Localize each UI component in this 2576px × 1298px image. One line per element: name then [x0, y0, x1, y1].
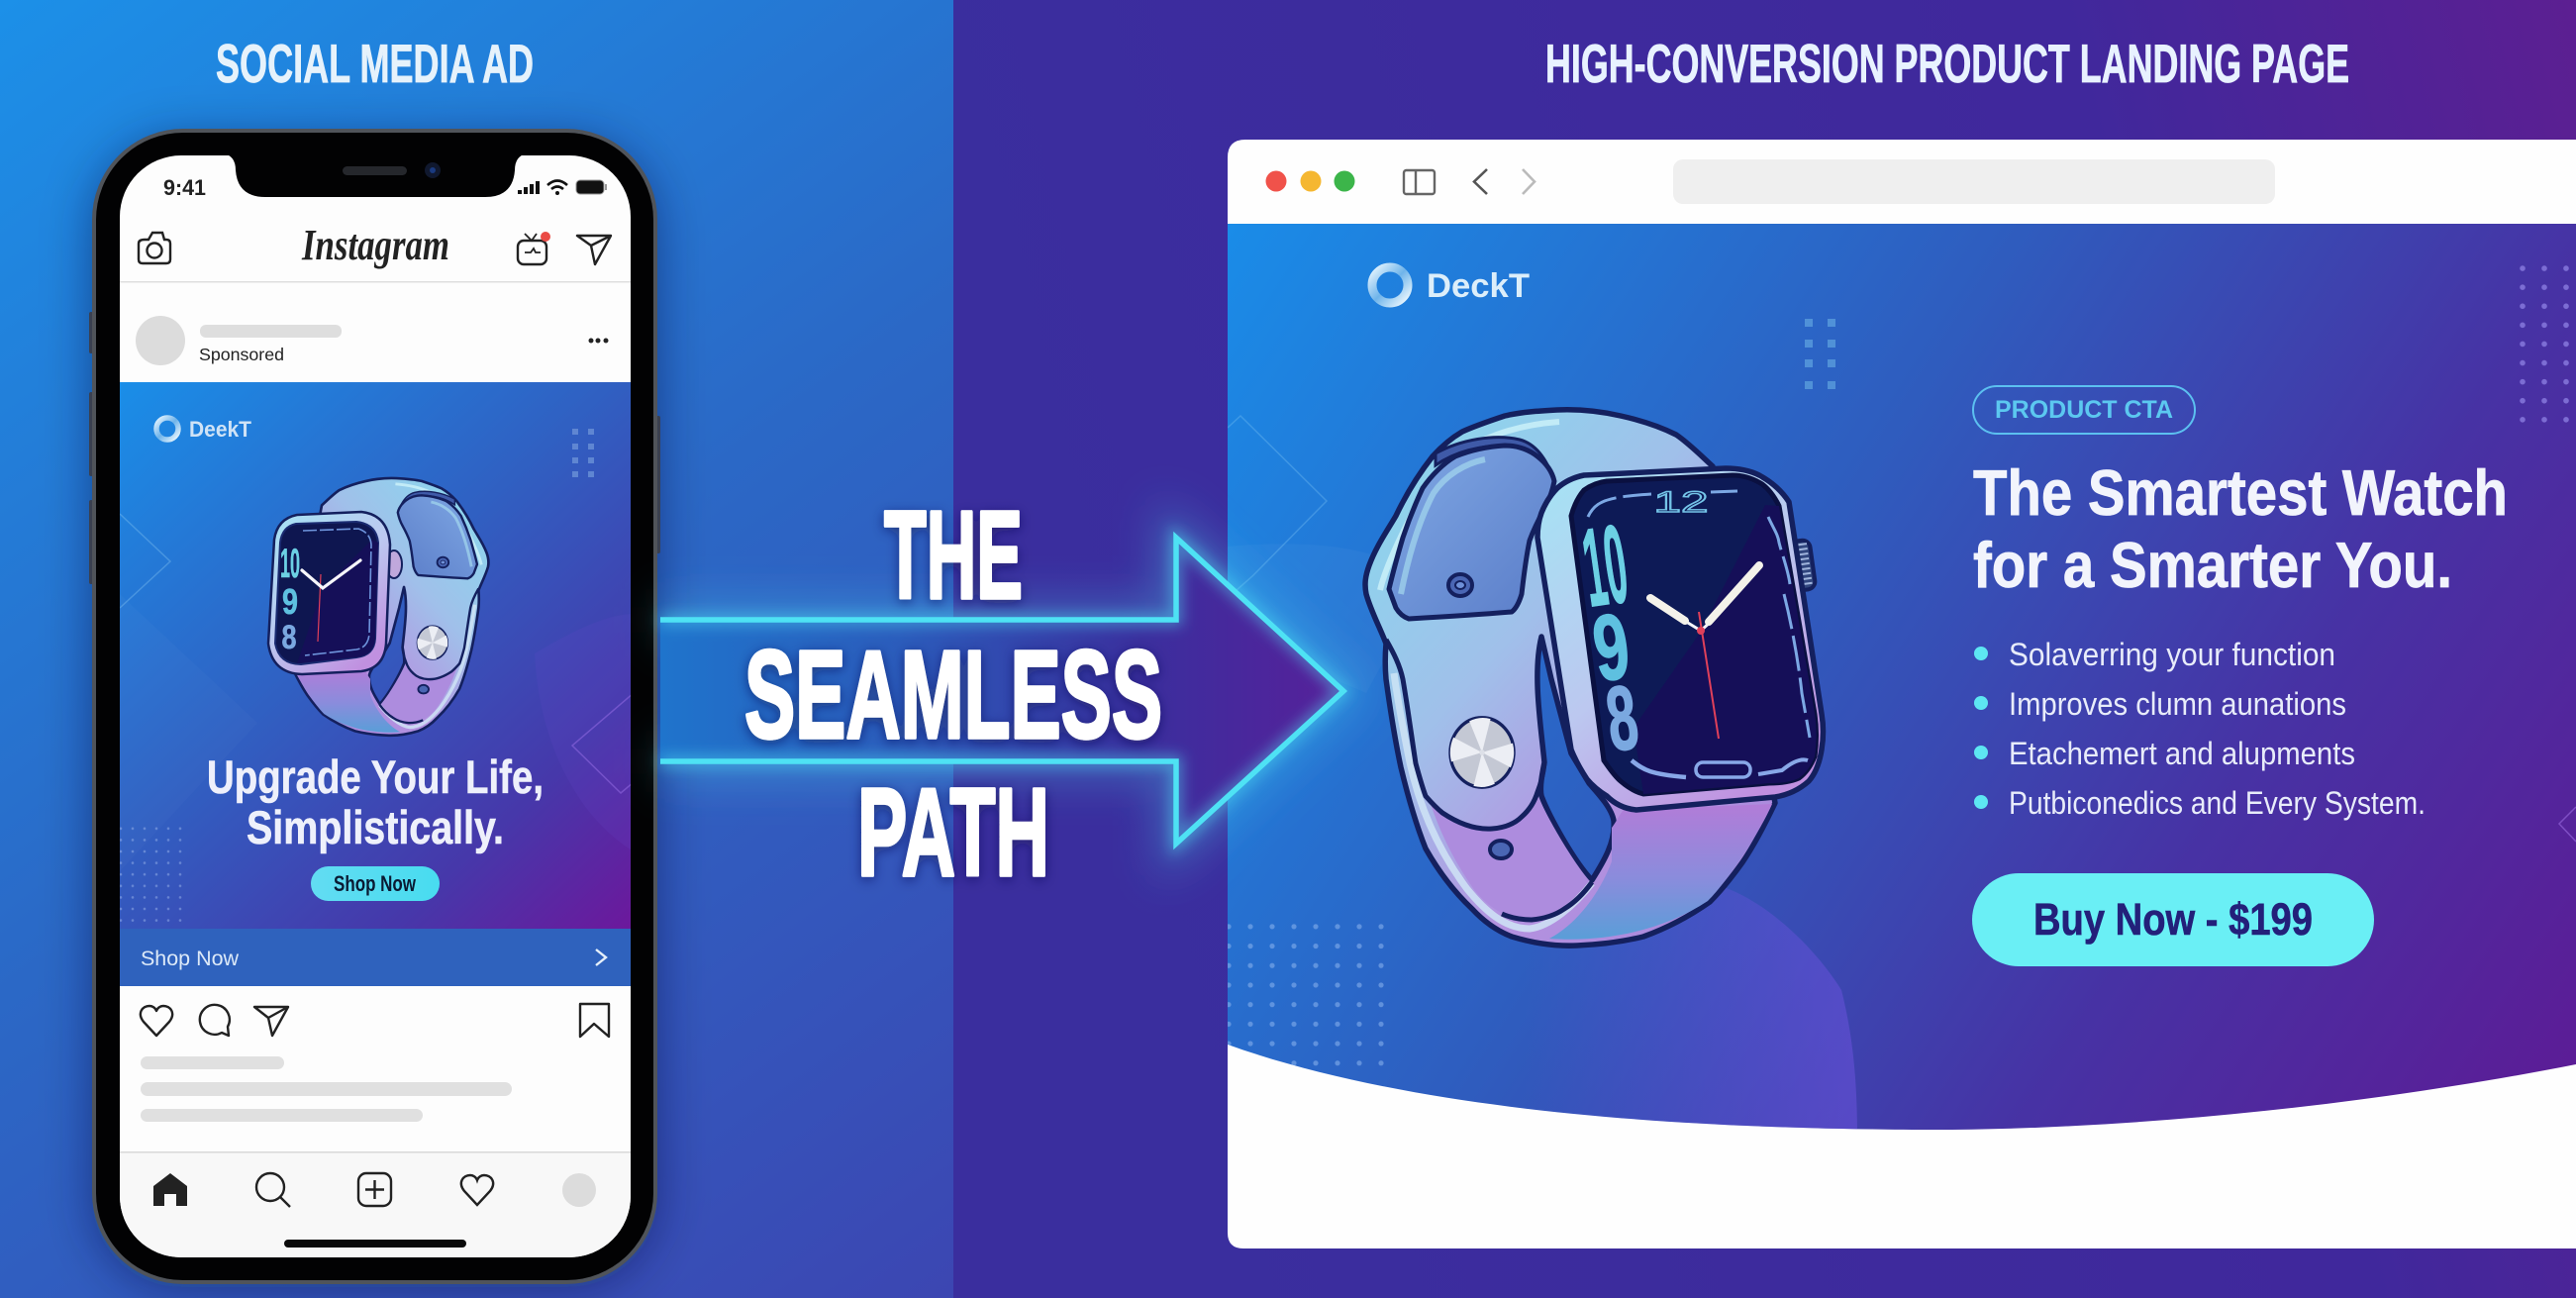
icon: large watch: 12	[1653, 486, 1709, 519]
icon: like heart	[141, 1006, 172, 1036]
shop now bar	[120, 929, 631, 986]
watch face track	[1588, 491, 1810, 738]
phone screen	[117, 155, 634, 1257]
product tag pill: PRODUCT CTA	[1995, 396, 2173, 424]
address bar	[1673, 159, 2275, 204]
browser window	[1218, 140, 2576, 1248]
center arrow	[660, 538, 1343, 844]
icon: sidebar	[1404, 170, 1435, 194]
notch	[223, 153, 528, 197]
icon: add	[358, 1173, 391, 1206]
browser controls	[1265, 169, 1535, 194]
feature list: Putbiconedics and Every System.	[2009, 785, 2426, 821]
icon: small watch	[268, 478, 488, 736]
landing headline: for a Smarter You.	[1973, 529, 2452, 601]
icon: send	[577, 236, 611, 264]
watch hands	[1699, 612, 1719, 739]
icon: large watch: 8	[1601, 666, 1644, 771]
center title: SEAMLESS	[744, 625, 1162, 764]
center title: THE	[884, 485, 1023, 625]
bottom navigation	[153, 1173, 596, 1207]
center title: PATH	[857, 762, 1049, 902]
landing headline	[1973, 456, 2508, 601]
icon: igtv	[518, 232, 550, 264]
landing headline: The Smartest Watch	[1973, 456, 2508, 529]
feature list	[1974, 637, 2426, 821]
status bar: 9:41	[163, 175, 206, 200]
home indicator	[284, 1240, 466, 1248]
landing logo: DeckT	[1427, 267, 1530, 305]
instagram header	[137, 231, 612, 269]
buy button	[1972, 873, 2374, 966]
ad headline: Simplistically.	[247, 801, 504, 853]
post header: Sponsored	[199, 345, 284, 364]
ad logo: DeekT	[189, 417, 252, 442]
ad button: shop now	[311, 866, 440, 901]
heading: social media ad: SOCIAL MEDIA AD	[216, 33, 534, 94]
icon: comment	[200, 1005, 230, 1036]
icon: camera	[139, 233, 170, 263]
icon: small watch: 8	[281, 619, 297, 656]
icon: bookmark	[580, 1004, 609, 1037]
landing page hero	[1218, 224, 2576, 1145]
icon: large watch: 10	[1576, 502, 1635, 630]
feature list: Improves clumn aunations	[2009, 686, 2346, 722]
ad button: shop now: Shop Now	[334, 871, 417, 896]
center title	[744, 485, 1162, 902]
icon: home	[153, 1173, 187, 1206]
icon: large watch	[1365, 410, 1824, 946]
post actions	[141, 1004, 609, 1037]
ad headline	[207, 750, 544, 853]
background right panel	[953, 0, 2576, 1298]
icon: small watch: 10	[280, 540, 300, 586]
icon: send	[254, 1007, 288, 1036]
status bar	[163, 175, 607, 200]
phone mockup	[89, 131, 660, 1287]
feature list: Solaverring your function	[2009, 637, 2335, 672]
feature list: Etachemert and alupments	[2009, 736, 2355, 771]
ad creative	[117, 382, 634, 929]
icon: back and forward	[1474, 169, 1487, 194]
ad logo	[156, 417, 252, 442]
background left panel	[0, 0, 953, 1298]
product tag pill	[1973, 386, 2195, 434]
icon: activity heart	[461, 1175, 493, 1205]
icon: large watch: 9	[1587, 593, 1635, 701]
profile avatar	[562, 1173, 596, 1207]
shop now bar: Shop Now	[141, 948, 240, 970]
ad headline: Upgrade Your Life,	[207, 750, 544, 803]
landing logo	[1372, 267, 1530, 305]
phone side buttons	[89, 312, 660, 584]
icon: small watch: 9	[282, 581, 298, 622]
watch face	[1571, 475, 1816, 794]
watch case	[1537, 468, 1824, 810]
watch crown	[1789, 540, 1816, 591]
caption placeholder lines	[141, 1056, 512, 1122]
icon: search	[256, 1173, 290, 1207]
phone body	[94, 131, 655, 1282]
buy button: Buy Now - $199	[2033, 894, 2313, 945]
post header	[136, 316, 608, 365]
instagram wordmark: Instagram	[301, 221, 449, 269]
